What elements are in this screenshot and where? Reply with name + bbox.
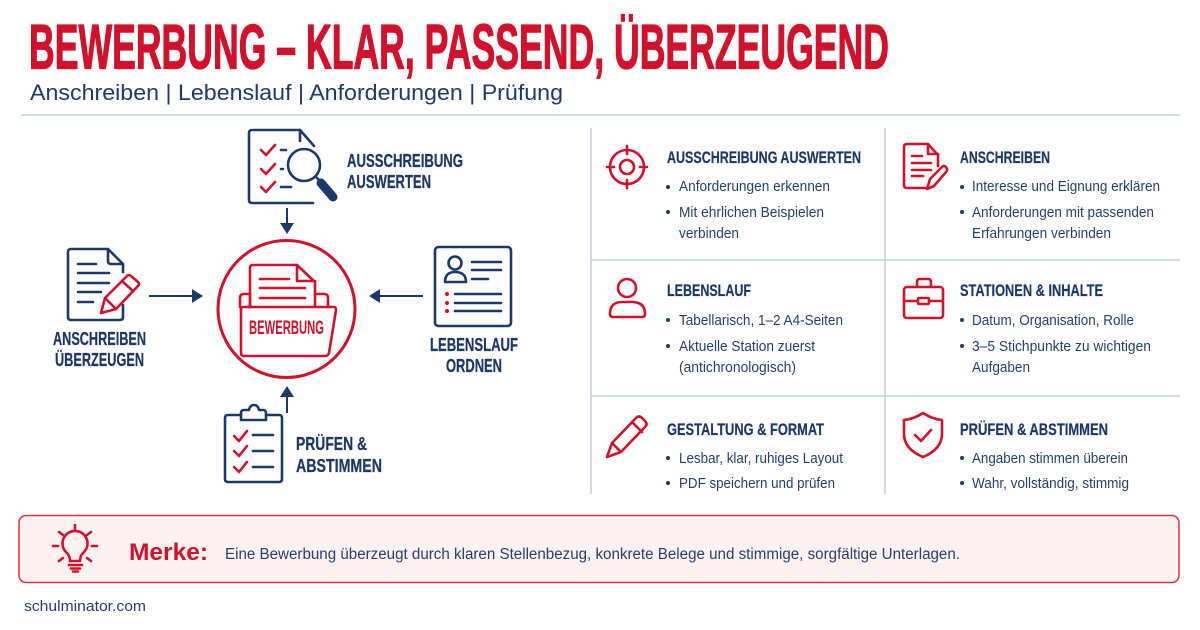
icon: briefcase [904,279,943,318]
label: Lebenslauf ordnen: ORDNEN [446,356,502,376]
icon: shield with check [904,413,942,457]
icon: light bulb [53,525,97,572]
subtitle: Anschreiben | Lebenslauf | Anforderungen | Prüfung [30,80,563,105]
bullet list: Angaben stimmen überein [972,451,1128,467]
label: Anschreiben überzeugen: ANSCHREIBEN [53,329,146,349]
icon: job ad with magnifier [249,130,333,203]
heading: PRÜFEN & ABSTIMMEN [960,420,1108,439]
bullet list [666,451,843,492]
heading: STATIONEN & INHALTE [960,282,1103,300]
icon: target [607,146,647,188]
label: Anschreiben überzeugen: ÜBERZEUGEN [55,350,144,370]
panel: Gestaltung & Format [607,416,843,492]
label: Prüfen & abstimmen: ABSTIMMEN [296,456,382,476]
bullet list: PDF speichern und prüfen [679,476,835,492]
arrow: down [280,208,294,234]
bullet list [960,179,1160,242]
panel: Anschreiben [904,144,1160,242]
bullet list [666,313,843,376]
bullet list: Erfahrungen verbinden [972,226,1111,242]
bullet list [960,313,1151,376]
bullet list: 3–5 Stichpunkte zu wichtigen [972,339,1151,355]
icon: document with pencil [904,144,947,189]
heading: LEBENSLAUF [667,282,751,300]
process diagram [53,130,518,482]
label: Ausschreibung auswerten [347,151,463,192]
label: Lebenslauf ordnen [430,335,518,376]
arrow: right [149,289,203,303]
icon: person [610,279,645,317]
bullet list: Aktuelle Station zuerst [679,339,815,355]
bullet list: Lesbar, klar, ruhiges Layout [679,451,843,467]
bullet list: (antichronologisch) [679,360,796,376]
panel: Prüfen & abstimmen [904,413,1129,492]
bullet list: Mit ehrlichen Beispielen [679,205,824,221]
central folder: Bewerbung [218,240,355,378]
label: Prüfen & abstimmen: PRÜFEN & [296,434,367,454]
bullet list: Wahr, vollständig, stimmig [972,476,1129,492]
arrow: up [280,386,294,413]
central folder: Bewerbung: BEWERBUNG [249,317,324,339]
icon: pencil [607,416,646,457]
bullet list: Tabellarisch, 1–2 A4-Seiten [679,313,843,329]
heading: AUSSCHREIBUNG AUSWERTEN [667,149,861,167]
label: Ausschreibung auswerten: AUSWERTEN [347,172,431,192]
panel: Stationen & Inhalte [904,279,1151,376]
bullet list [960,451,1129,492]
label: Anschreiben überzeugen [53,329,146,370]
label: Ausschreibung auswerten: AUSSCHREIBUNG [347,151,463,171]
key message: Eine Bewerbung überzeugt durch klaren Stellenbezug, konkrete Belege und stimmige, sorgfältige Unterlagen. [225,546,960,563]
icon: clipboard checklist [225,405,282,482]
label: Merke: Merke: [129,539,208,566]
bullet list: verbinden [679,226,739,242]
bullet list: Anforderungen erkennen [679,179,830,195]
icon: cover letter with pencil [68,249,139,320]
panel: Lebenslauf [610,279,843,376]
callout: Merke [19,516,1179,582]
heading: ANSCHREIBEN [960,149,1050,167]
panel: Ausschreibung auswerten [607,146,861,242]
bullet list: Anforderungen mit passenden [972,205,1154,221]
label: Lebenslauf ordnen: LEBENSLAUF [430,335,518,355]
bullet list: Aufgaben [972,360,1030,376]
bullet list [666,179,830,242]
bullet list: Interesse und Eignung erklären [972,179,1160,195]
arrow: left [369,289,423,303]
icon: CV [435,247,511,326]
bullet list: Datum, Organisation, Rolle [972,313,1134,329]
label: Prüfen & abstimmen [296,434,382,476]
heading: GESTALTUNG & FORMAT [667,421,824,439]
source footer: schulminator.com [24,598,146,615]
